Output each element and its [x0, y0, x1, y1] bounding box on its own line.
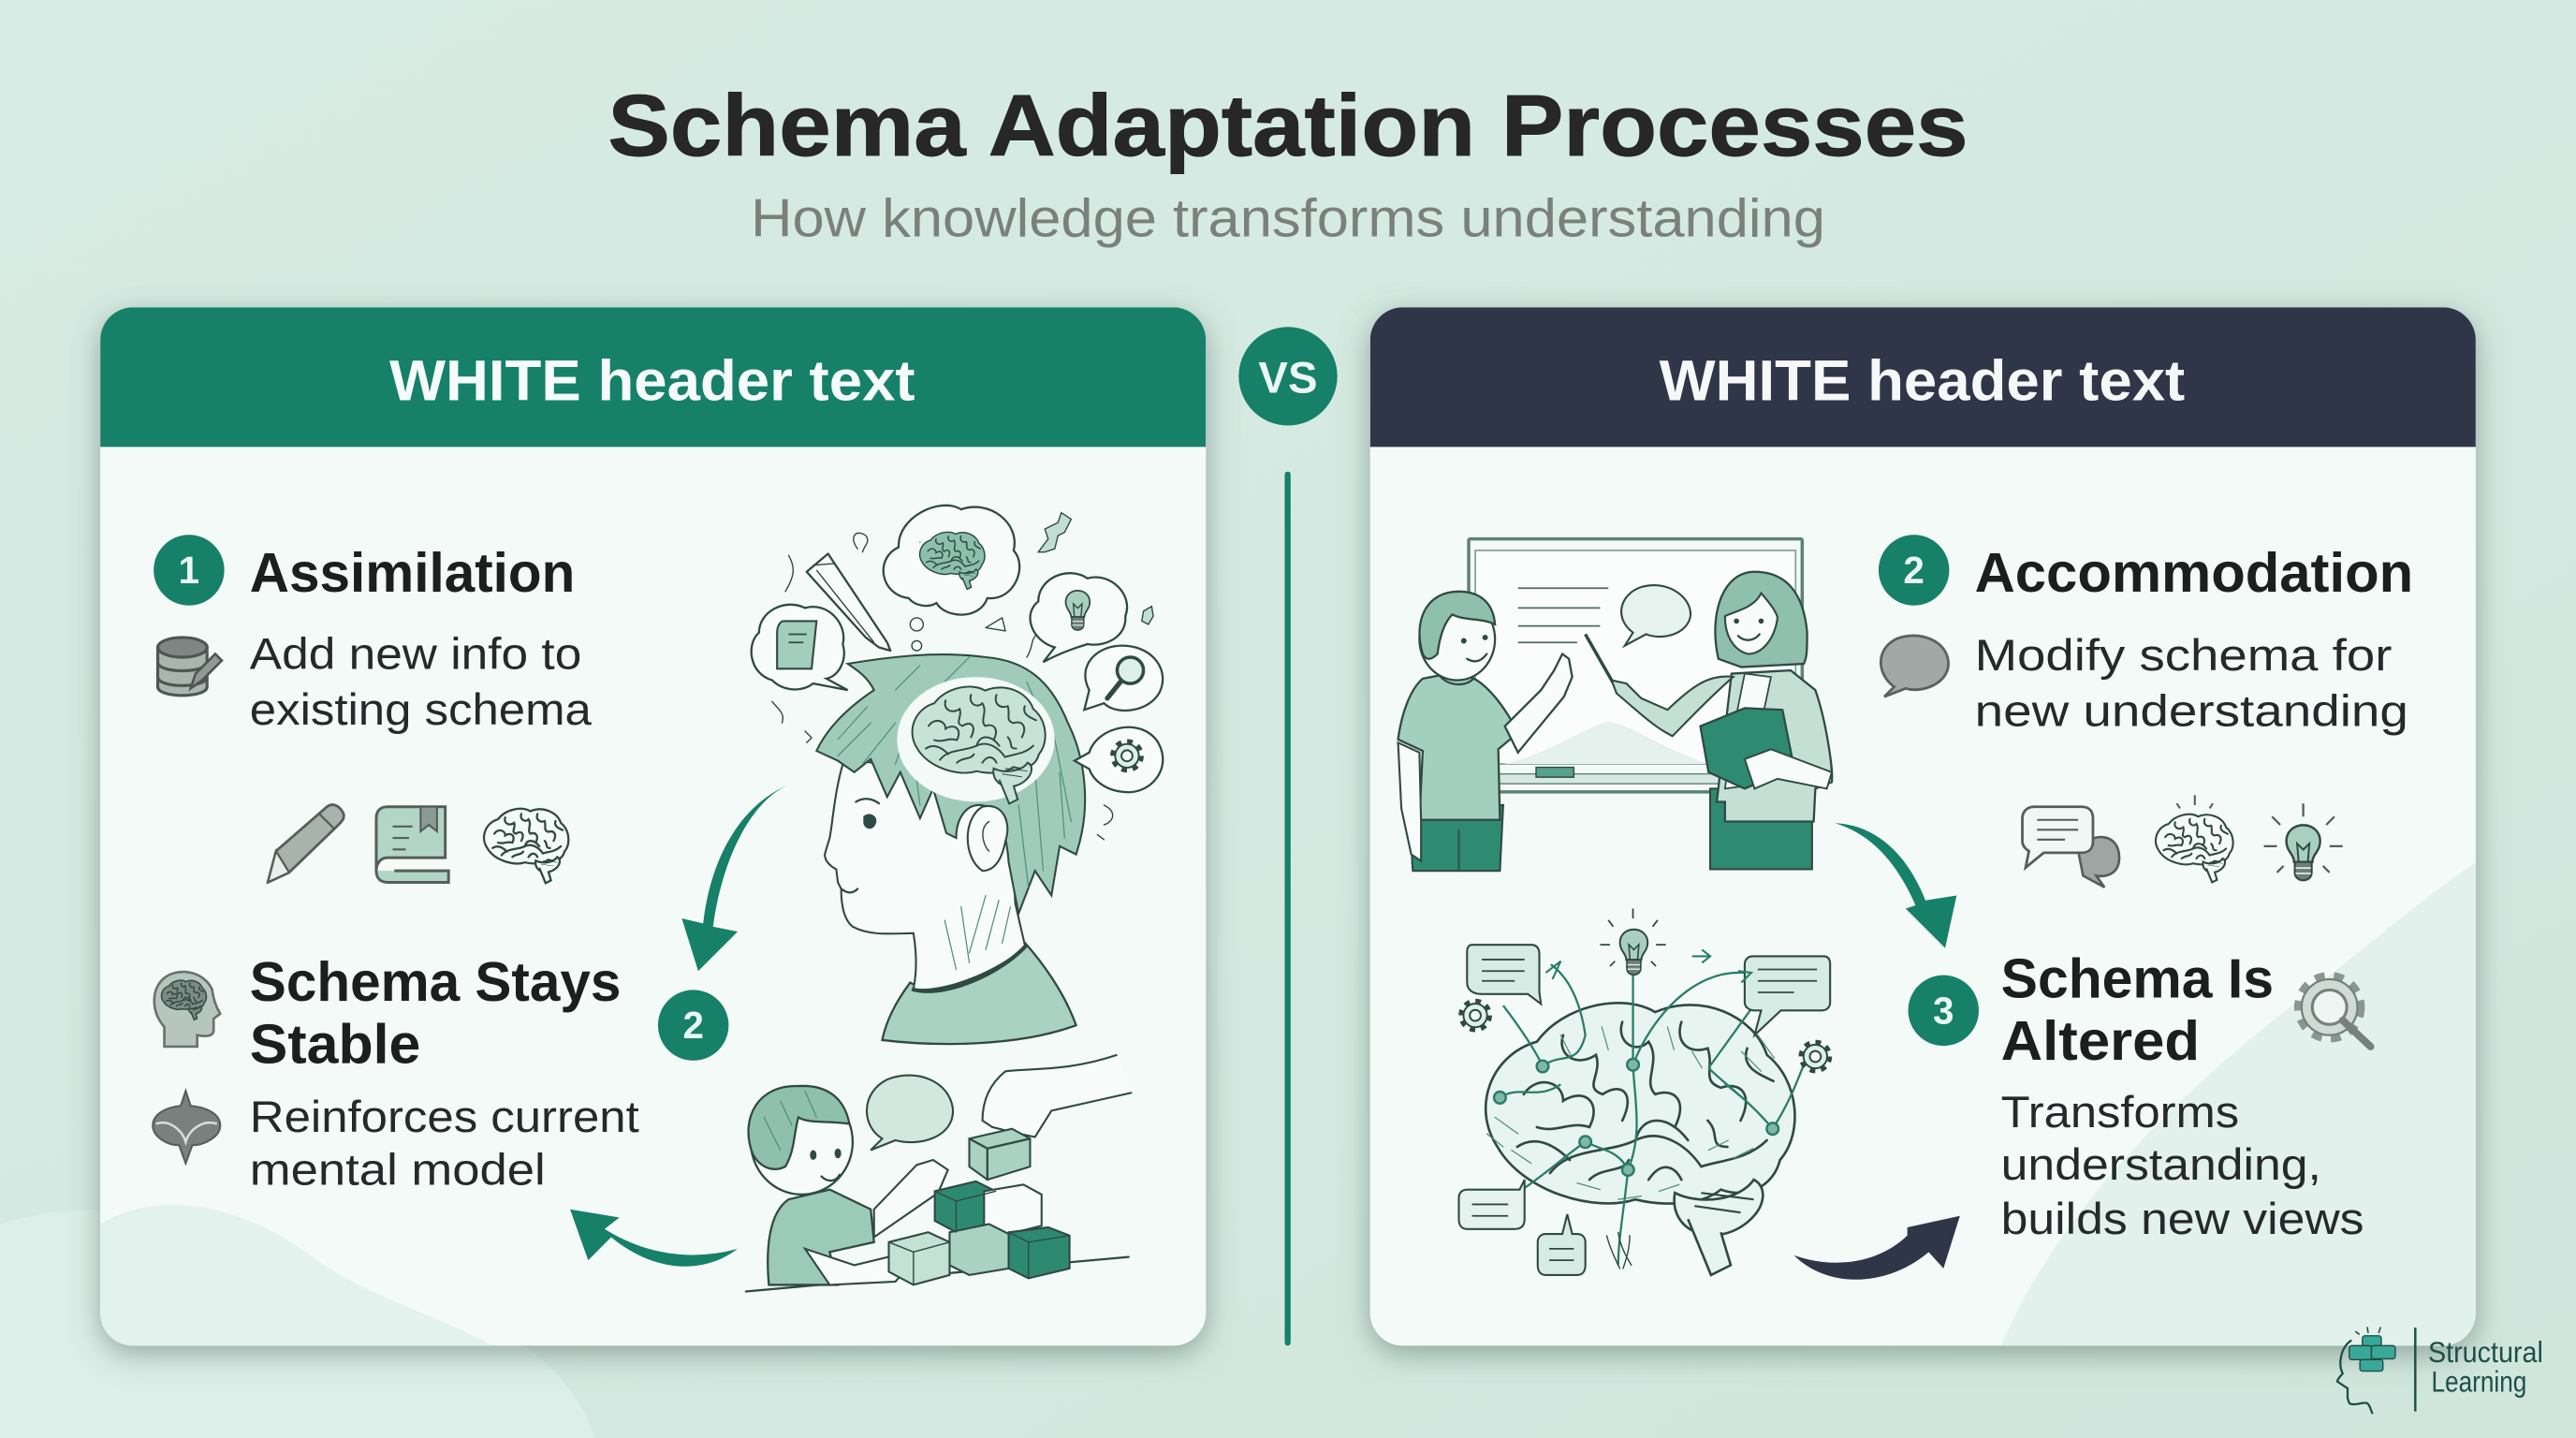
text: add new info: existing schema: [250, 685, 593, 735]
illustration: boy with brain and thought bubbles: [752, 506, 1163, 1044]
cloud: book: [752, 605, 848, 690]
icon: mental model: [153, 1091, 220, 1164]
board speech bubble: [1621, 585, 1690, 646]
text: reinforces: Reinforces current: [250, 1093, 639, 1142]
icon row: chat, brain, bulb: [2022, 795, 2343, 888]
arrow: brain to schema altered: [1794, 1216, 1960, 1280]
arrow: teacher to schema altered: [1835, 823, 1956, 948]
shirt: [883, 943, 1076, 1044]
step 1 badge: 1: [179, 549, 199, 592]
panel: assimilation: [100, 307, 1206, 1364]
step 2 badge: [658, 990, 728, 1061]
step 1 badge: [154, 535, 225, 606]
left header text: WHITE header text: [389, 348, 915, 413]
text: add new info: [250, 629, 593, 735]
hand and held block: [983, 1055, 1132, 1137]
icon: speech bubble: [1881, 636, 1949, 697]
text: modify schema: [1975, 631, 2408, 737]
heading: schema is altered: Altered: [2001, 1009, 2200, 1072]
shirt: [768, 1190, 874, 1284]
text: transforms understanding: [2001, 1088, 2364, 1244]
bulb above brain: [1620, 930, 1647, 975]
gears and small arrows: [1461, 1002, 1489, 1029]
vs badge and divider: [1238, 327, 1338, 1345]
arrow: blocks to schema stable: [570, 1210, 738, 1267]
icon row: pencil, book, brain: [268, 805, 568, 883]
heading: schema stays stable: Schema Stays: [250, 950, 621, 1013]
text: reinforces: [250, 1093, 639, 1195]
title: Schema Adaptation Processes: [607, 77, 1969, 174]
step 3 badge: 3: [1933, 989, 1954, 1032]
heading: schema is altered: Schema Is: [2001, 946, 2274, 1009]
logo: structural learning: [2337, 1328, 2543, 1413]
face and neck: [825, 759, 1025, 990]
icon: gear with magnifier: [2298, 976, 2371, 1047]
heading: accommodation: Accommodation: [1975, 541, 2413, 604]
heading: schema is altered: [2001, 946, 2274, 1072]
logo: structural learning: Structural: [2428, 1335, 2543, 1369]
text: modify schema: Modify schema for: [1975, 631, 2392, 681]
blocks: [935, 1181, 996, 1232]
teacher: [1612, 572, 1832, 869]
bubble: magnifier: [1084, 646, 1163, 711]
step 3 badge: [1909, 976, 1979, 1046]
text: modify schema: new understanding: [1975, 687, 2408, 737]
connections: [1490, 964, 1804, 1265]
board: [1469, 539, 1802, 792]
icon: head with brain: [154, 972, 220, 1047]
illustration: child stacking blocks: [746, 1055, 1132, 1291]
cloud: bulb: [1031, 573, 1127, 662]
student: [1398, 592, 1573, 871]
text: add new info: Add new info to: [250, 629, 581, 679]
pencil: [807, 553, 890, 651]
eye and mouth: [856, 799, 879, 803]
text: reinforces: mental model: [250, 1145, 546, 1195]
speech cards: [1467, 945, 1541, 1004]
thought doodles: [772, 533, 1113, 840]
heading: schema stays stable: [250, 950, 621, 1076]
text: transforms understanding: Transforms: [2001, 1088, 2239, 1137]
speech bubble: [867, 1076, 953, 1151]
brain in head: [897, 677, 1055, 801]
illustration: rewired brain with ideas: [1459, 909, 1830, 1275]
icon: database with pencil: [158, 638, 222, 696]
logo: structural learning: Learning: [2431, 1365, 2526, 1399]
illustration: teacher and student at board: [1398, 539, 1832, 871]
hair: [816, 654, 1085, 914]
heading: assimilation: Assimilation: [250, 541, 575, 604]
right header text: WHITE header text: [1660, 348, 2185, 413]
cloud: brain: [884, 506, 1019, 615]
heading: schema stays stable: Stable: [250, 1013, 420, 1076]
panel: accommodation: [1370, 307, 2476, 1364]
arrow: boy to step 2: [681, 785, 787, 971]
pointer: [1586, 634, 1618, 692]
bubble: gear: [1075, 727, 1163, 792]
step 2 badge right: [1879, 535, 1949, 606]
text: transforms understanding: understanding,: [2001, 1140, 2321, 1190]
vs badge and divider: VS: [1258, 353, 1318, 403]
brain shading: [1486, 1027, 1774, 1199]
subtitle: How knowledge transforms understanding: [751, 189, 1825, 249]
step 2 badge right: 2: [1903, 549, 1925, 592]
head: [751, 1090, 853, 1195]
ear: [968, 806, 1007, 871]
step 2 badge: 2: [682, 1004, 704, 1047]
text: transforms understanding: builds new views: [2001, 1195, 2364, 1244]
